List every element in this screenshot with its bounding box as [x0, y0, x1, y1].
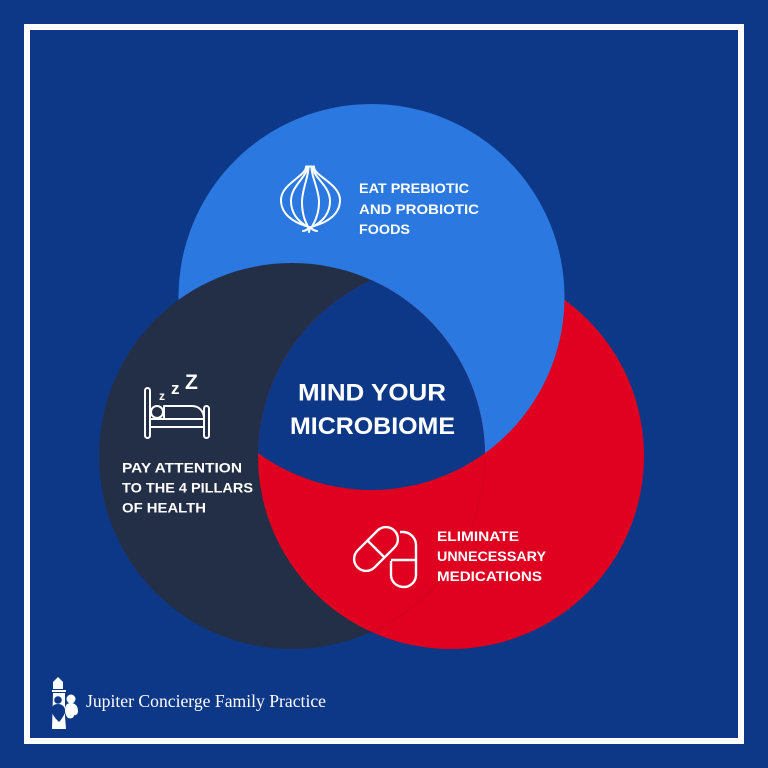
logo [52, 677, 326, 729]
label: pay attention: TO THE 4 PILLARS [122, 480, 253, 496]
circle: blue [178, 104, 564, 490]
venn diagram [99, 104, 644, 649]
icon: pills [349, 522, 416, 587]
label: eat prebiotic: EAT PREBIOTIC [359, 180, 469, 196]
circle: red [258, 263, 644, 649]
label: eliminate medications [437, 528, 547, 584]
icon: bed with sleeper: z [159, 389, 165, 403]
label: eliminate medications: ELIMINATE [437, 528, 519, 544]
label: eliminate medications: MEDICATIONS [437, 568, 542, 584]
label: pay attention: PAY ATTENTION [122, 460, 242, 476]
circle: dark navy [99, 263, 485, 649]
label: pay attention [122, 460, 253, 516]
title [290, 380, 455, 440]
center overlap region [258, 280, 485, 490]
icon: bed with sleeper [145, 371, 209, 438]
label: eat prebiotic [359, 180, 479, 237]
title: MIND YOUR [298, 380, 446, 406]
label: eat prebiotic: FOODS [359, 221, 410, 237]
label: eliminate medications: UNNECESSARY [437, 548, 547, 564]
title: MICROBIOME [290, 413, 455, 440]
brand name: Jupiter Concierge Family Practice [86, 691, 326, 711]
icon: bed with sleeper: z [171, 379, 180, 398]
overlap: red over dark [258, 280, 485, 632]
label: pay attention: OF HEALTH [122, 500, 206, 516]
icon: bed with sleeper: Z [185, 371, 198, 394]
label: eat prebiotic: AND PROBIOTIC [359, 201, 479, 217]
icon: lighthouse with family [52, 677, 78, 729]
icon: onion [281, 166, 340, 232]
